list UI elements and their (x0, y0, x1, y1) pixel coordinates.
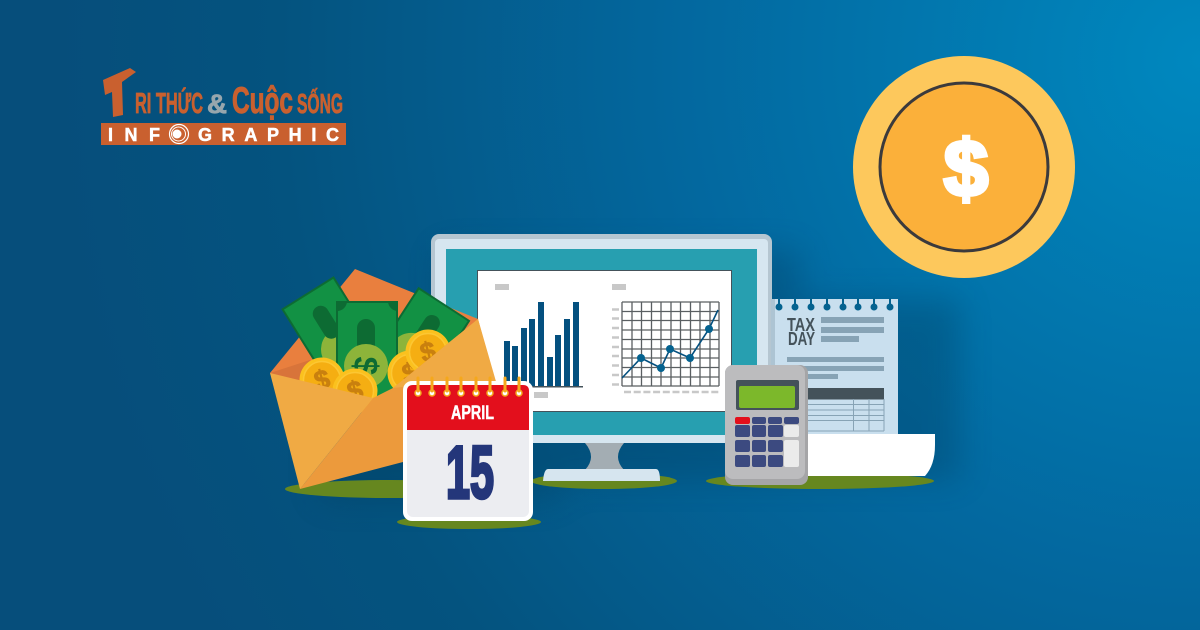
logo: INF (108, 125, 160, 145)
tax day document: DAY (788, 329, 815, 349)
envelope front (300, 319, 495, 489)
logo: Cuộc (232, 80, 293, 121)
monitor (431, 234, 772, 481)
banknotes: $ (346, 357, 384, 376)
soft object shadows (320, 250, 960, 500)
calculator (725, 365, 808, 485)
logo: SỐNG (297, 87, 343, 119)
logo: RI THỨC (135, 86, 203, 120)
coin with dollar sign (853, 56, 1075, 278)
calendar month: APRIL (451, 403, 494, 424)
monitor stand (585, 443, 624, 470)
tax day document (771, 298, 935, 476)
calendar date: 15 (446, 431, 494, 514)
dollar sign: $ (944, 124, 988, 213)
logo: GRAPHIC (198, 125, 339, 145)
banknotes (281, 276, 470, 404)
logo: & (207, 89, 227, 119)
logo (101, 68, 346, 145)
line chart (612, 302, 720, 392)
bar chart (502, 302, 583, 388)
calendar (403, 378, 533, 521)
tax day document: TAX (787, 315, 815, 335)
coins (300, 330, 450, 414)
envelope with money (270, 269, 497, 489)
ground ellipses (285, 473, 934, 529)
